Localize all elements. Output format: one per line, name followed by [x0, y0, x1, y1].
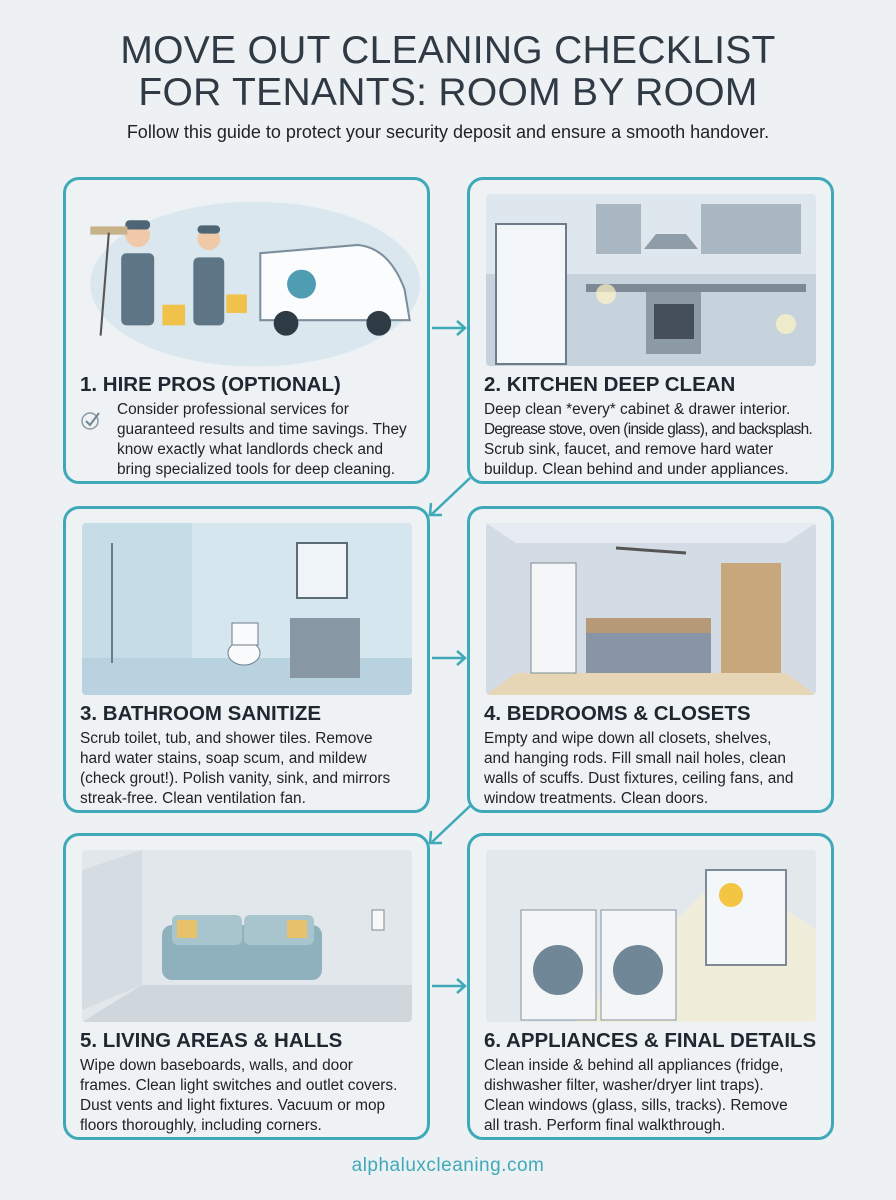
body text: window treatments. Clean doors.	[484, 790, 708, 807]
body text: Empty and wipe down all closets, shelves,	[484, 730, 771, 747]
panel: living areas	[63, 833, 430, 1140]
panel: kitchen	[467, 177, 834, 484]
title: FOR TENANTS: ROOM BY ROOM	[138, 71, 758, 114]
illustration: bedroom	[486, 523, 816, 695]
arrow: 1 to 2	[432, 320, 467, 336]
body text: and hanging rods. Fill small nail holes, clean	[484, 750, 786, 767]
arrow: 4 to 5	[428, 805, 470, 844]
subtitle: Follow this guide to protect your security deposit and ensure a smooth handover.	[127, 122, 769, 142]
body text: (check grout!). Polish vanity, sink, and mirrors	[80, 770, 390, 787]
body text: Dust vents and light fixtures. Vacuum or mop	[80, 1097, 385, 1114]
body text	[80, 1057, 397, 1134]
body text	[117, 401, 407, 478]
body text: Clean inside & behind all appliances (fridge,	[484, 1057, 783, 1074]
heading: 5. LIVING AREAS & HALLS	[80, 1029, 342, 1052]
body text: know exactly what landlords check and	[117, 441, 383, 458]
body text: Scrub sink, faucet, and remove hard water	[484, 441, 773, 458]
body text: Degrease stove, oven (inside glass), and backsplash.	[484, 421, 812, 438]
panel: hire pros	[63, 177, 430, 484]
title	[120, 29, 776, 114]
body text: Consider professional services for	[117, 401, 349, 418]
body text: Clean windows (glass, sills, tracks). Remove	[484, 1097, 788, 1114]
body text: all trash. Perform final walkthrough.	[484, 1117, 725, 1134]
body text: hard water stains, soap scum, and mildew	[80, 750, 367, 767]
body text	[484, 730, 793, 807]
body text: streak-free. Clean ventilation fan.	[80, 790, 306, 807]
panel: bathroom	[63, 506, 430, 813]
body text: dishwasher filter, washer/dryer lint traps).	[484, 1077, 764, 1094]
arrow: 2 to 3	[428, 477, 471, 516]
heading: 1. HIRE PROS (OPTIONAL)	[80, 373, 341, 396]
title: MOVE OUT CLEANING CHECKLIST	[120, 29, 776, 72]
heading: 4. BEDROOMS & CLOSETS	[484, 702, 751, 725]
body text: bring specialized tools for deep cleaning.	[117, 461, 395, 478]
body text: buildup. Clean behind and under appliances.	[484, 461, 789, 478]
panel: bedrooms	[467, 506, 834, 813]
body text	[484, 401, 812, 478]
heading: 2. KITCHEN DEEP CLEAN	[484, 373, 735, 396]
body text: floors thoroughly, including corners.	[80, 1117, 322, 1134]
illustration: kitchen	[486, 194, 816, 366]
body text: Deep clean *every* cabinet & drawer interior.	[484, 401, 790, 418]
illustration: bathroom	[82, 523, 412, 695]
arrow: 5 to 6	[432, 978, 467, 994]
heading: 3. BATHROOM SANITIZE	[80, 702, 321, 725]
body text: Wipe down baseboards, walls, and door	[80, 1057, 353, 1074]
arrow: 3 to 4	[432, 650, 467, 666]
body text	[80, 730, 390, 807]
panel: appliances	[467, 833, 834, 1140]
heading: 6. APPLIANCES & FINAL DETAILS	[484, 1029, 816, 1052]
illustration: living room	[82, 850, 412, 1022]
illustration: cleaners and van	[90, 202, 420, 366]
footer url: alphaluxcleaning.com	[352, 1155, 544, 1176]
body text	[484, 1057, 788, 1134]
body text: Scrub toilet, tub, and shower tiles. Remove	[80, 730, 373, 747]
body text: frames. Clean light switches and outlet covers.	[80, 1077, 397, 1094]
illustration: laundry and window	[486, 850, 816, 1022]
body text: walls of scuffs. Dust fixtures, ceiling fans, and	[484, 770, 793, 787]
body text: guaranteed results and time savings. They	[117, 421, 407, 438]
icon: check	[81, 412, 100, 430]
